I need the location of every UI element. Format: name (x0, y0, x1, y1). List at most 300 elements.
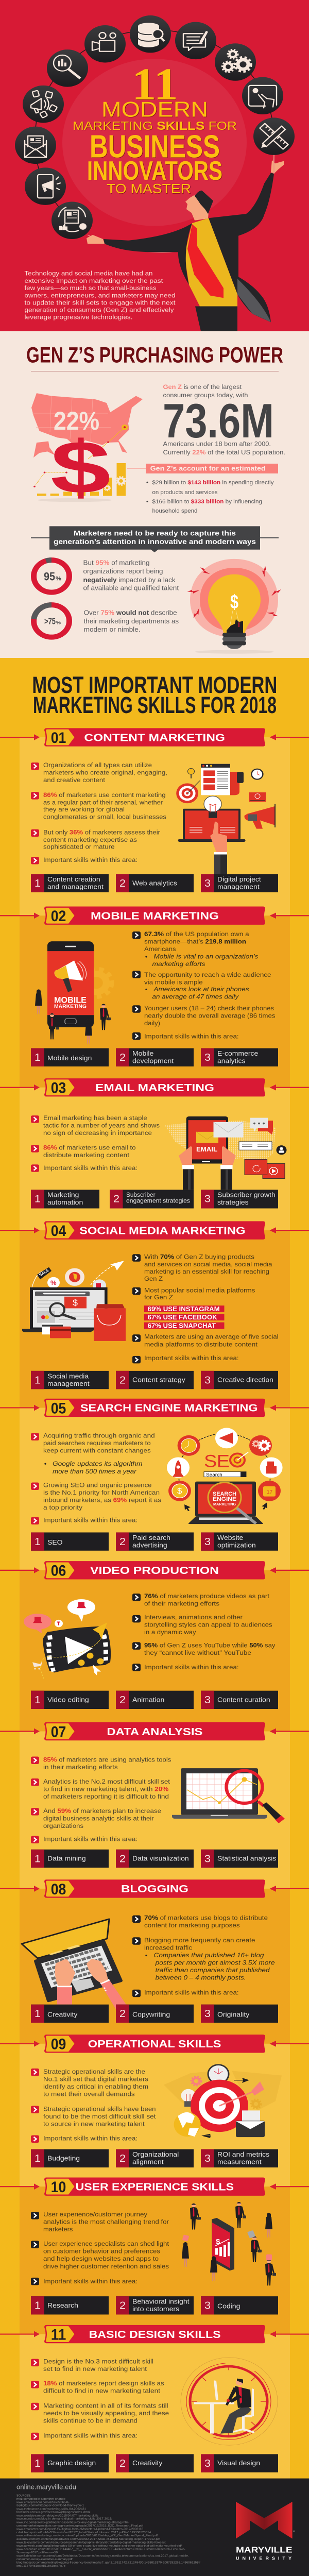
banner 05: SEARCH ENGINE MARKETING (80, 1403, 258, 1414)
skill 1: 1 (35, 1694, 41, 1706)
icon: magnifier chart (47, 49, 88, 87)
banner 10: 10 (51, 2178, 66, 2196)
banner 04: SOCIAL MEDIA MARKETING (79, 1225, 245, 1236)
bullet text (31, 1756, 171, 1843)
sources list: www.entrepreneur.com/article/286545 (16, 2501, 70, 2504)
bullet text: no sign of decreasing in importance (43, 1130, 152, 1137)
donut: 95%: % (56, 576, 61, 582)
website url: online.maryville.edu (16, 2483, 76, 2490)
bullet text: storytelling styles can appeal to audiences (144, 1621, 272, 1628)
skill 3: 3 (204, 1853, 211, 1865)
bullet text: 67.3% of the US population own a (144, 931, 249, 938)
illustration: email tablet (165, 1116, 286, 1190)
bullet text: conglomerates or small, local businesses (43, 814, 166, 820)
skill 2: Mobile (132, 1050, 153, 1057)
panel: 06 video production (0, 1561, 309, 1732)
bullet text: they “cannot live without” YouTube (144, 1649, 251, 1656)
intro paragraph: owners, entrepreneurs, and marketers may need (25, 292, 176, 299)
center spotlight circle (62, 59, 247, 226)
skill 2: Subscriber (126, 1191, 156, 1198)
skill 1 (31, 1532, 109, 1551)
skill 3: 3 (204, 1694, 211, 1706)
sources list: www2.deloitte.com/content/dam/Deloitte/us/Documents/technology-media-telecommunications/us-tmt-2017-global-mobile- (16, 2554, 189, 2557)
text: 75% stat: Over 75% would not describe (84, 609, 177, 616)
skill tags (31, 1371, 278, 1389)
bullet text: marketers who create original, engaging, (43, 769, 167, 776)
banner 09: 09 (51, 2035, 66, 2053)
bullet text: analytics is the most challenging trend for (43, 2218, 169, 2226)
donut: over 75%: % (56, 620, 61, 626)
skill 1: management (47, 1380, 90, 1387)
banner 07 (0, 1722, 309, 1740)
skill 3: Coding (217, 2302, 240, 2310)
skill 2: Behavioral insight (132, 2298, 190, 2305)
banner 03: EMAIL MARKETING (95, 1082, 214, 1094)
bullet text: Important skills within this area: (144, 1989, 238, 1996)
skill 2: 2 (119, 2458, 126, 2469)
footer (0, 2479, 309, 2576)
bullet text: 95% of Gen Z uses YouTube while 50% say (144, 1642, 276, 1649)
skill tags (31, 1850, 278, 1868)
bullet text: and creative content (43, 777, 106, 784)
bullet text: 18% of marketers report design skills as (43, 2380, 164, 2387)
bullet text: and services on social media, social media (144, 1261, 272, 1268)
illustration: social commerce laptop (22, 1261, 126, 1341)
skill 1: 1 (35, 1052, 41, 1063)
panel: Gen Z purchasing power (0, 331, 309, 658)
skill 2: Organizational (132, 2151, 179, 2158)
bullet text (132, 931, 275, 1040)
skill 3: 3 (204, 2300, 211, 2311)
skill 1 (31, 874, 109, 892)
bullet text: Important skills within this area: (43, 2135, 138, 2142)
skill 1: Graphic design (47, 2460, 96, 2467)
banner 11: 11 (51, 2326, 66, 2343)
bullet text: The opportunity to reach a wide audience (144, 972, 271, 978)
banner 06 (0, 1561, 309, 1580)
bullet text: media platforms to distribute content (144, 1341, 258, 1348)
title: INNOVATORS (87, 156, 222, 185)
icon: edit note (175, 22, 216, 59)
skill 1: Content creation (47, 876, 100, 883)
callout: spending estimates: $29 billion to $143 billion in spending directly (152, 480, 274, 486)
logo: Maryville University: UNIVERSITY (236, 2556, 291, 2561)
illustration: laptop with magnified chart (172, 1768, 285, 1823)
illustration: people around phone (182, 2202, 276, 2285)
skill 2: Creativity (132, 2460, 163, 2467)
bullet text: traffic than companies that published (156, 1967, 270, 1974)
donut: over 75% (34, 605, 69, 637)
skill 3: Originality (217, 2011, 250, 2018)
platform stats: 67% USE SNAPCHAT (148, 1322, 216, 1329)
bullet text: nearly double the overall average (86 times (144, 1012, 275, 1020)
bullet text: to meet their overall demands (43, 2091, 135, 2097)
skill 1 (31, 2149, 109, 2167)
bullet text (31, 2358, 169, 2440)
panel: 10 user experience skills (0, 2177, 309, 2334)
banner 01: CONTENT MARKETING (84, 732, 225, 743)
icon: mobile megaphone (25, 167, 66, 205)
skill 2 (116, 874, 194, 892)
illustration: social commerce laptop: % (50, 1280, 57, 1286)
skill tags (31, 2296, 278, 2314)
skill tags (31, 1691, 278, 1709)
skill 1: 1 (35, 878, 41, 889)
skill 1 (31, 2005, 109, 2023)
bullet text: increased traffic (144, 1944, 192, 1952)
text: 75% stat (84, 609, 179, 633)
bullet text: Important skills within this area: (43, 1165, 138, 1172)
skill 2 (116, 1691, 194, 1709)
skill 2 (116, 1532, 194, 1551)
skill 3: E-commerce (217, 1050, 258, 1057)
skill 3 (201, 1850, 278, 1868)
bullet text: in a dynamic way (144, 1629, 196, 1636)
skill 2 (116, 2296, 194, 2314)
bullet text: for Gen Z (144, 1294, 173, 1301)
bar chart and dollar sign (33, 426, 126, 509)
bullet text: Marketing content in all of its formats still (43, 2402, 168, 2410)
skill 3 (201, 1048, 278, 1066)
platform stats (144, 1305, 225, 1329)
bullet text (31, 2211, 169, 2285)
bullet text: User experience/customer journey (43, 2211, 148, 2218)
skill 1 (31, 1048, 109, 1066)
skill 3: 3 (204, 1052, 211, 1063)
bullet text: via mobile is ample (144, 979, 203, 986)
banner 06: 06 (51, 1562, 66, 1579)
bullet text: Important skills within this area: (144, 1664, 238, 1671)
skill tags (31, 2454, 278, 2472)
skill 2: 2 (113, 1194, 119, 1205)
banner 05 (0, 1399, 309, 1417)
illustration: SEO ring: MARKETING (213, 1502, 236, 1506)
skill 1: Budgeting (47, 2155, 80, 2162)
bullet text: But only 36% of marketers assess their (43, 829, 160, 836)
bullet text: to source in new marketing talent (43, 2121, 145, 2127)
skill 3 (201, 1190, 278, 1208)
illustration: email tablet: EMAIL (196, 1146, 217, 1153)
sources list: moz.com/google-algorithm-change (16, 2497, 66, 2501)
skill 1: 1 (35, 2458, 41, 2469)
banner 07: 07 (51, 1723, 66, 1740)
bullet text: Americans (144, 946, 176, 953)
text: 95% stat: But 95% of marketing (83, 559, 149, 566)
skill 3: measurement (217, 2158, 262, 2166)
skill 1: Mobile design (47, 1055, 92, 1062)
skill 3: 3 (204, 2458, 211, 2469)
bullet text: daily) (144, 1020, 160, 1027)
sources list: factfinder.census.gov/faces/nav/jsf/pages/index.xhtml (16, 2511, 90, 2514)
skill 3: Subscriber growth (217, 1191, 276, 1199)
banner 03 (0, 1078, 309, 1096)
bullet text: keep current with constant changes (43, 1447, 151, 1454)
skill 1: Social media (47, 1372, 89, 1380)
sources list: www.accenture.com/t20170503T114448Z__w__/us-en/_acnmedia/PDF-44/Accenture-Retail-Customer-Research-Executive- (16, 2548, 185, 2551)
banner 07: DATA ANALYSIS (107, 1726, 202, 1738)
icon: tablet touch (242, 77, 283, 114)
skill 2: 2 (119, 1536, 126, 1548)
bullet text: Blogging more frequently can create (144, 1937, 255, 1944)
banner 04 (0, 1221, 309, 1240)
skill 2: 2 (119, 1853, 126, 1865)
skill 3: ROI and metrics (217, 2151, 269, 2158)
bullet text: a top priority (43, 1504, 83, 1511)
connecting ring of skill icons (35, 30, 274, 221)
bullet text: Important skills within this area: (144, 1033, 238, 1040)
bullet text: 70% of marketers use blogs to distribute (144, 1914, 268, 1922)
bullet text: 86% of marketers use email to (43, 1144, 136, 1151)
skill 2: Copywriting (132, 2011, 170, 2018)
illustration: mobile marketing phone: MOBILE (54, 995, 87, 1005)
illustration: people around phone: $ (216, 2238, 220, 2246)
sources list: sm.0118794d1ct6e811bk1jotc7sj7z (16, 2564, 65, 2568)
bullet text: they are working for global (43, 806, 125, 813)
bullet text: Email marketing has been a staple (43, 1115, 147, 1122)
sources list: www.wordstream.com/blog/ws/2015/04/07/marketing-skills (16, 2514, 98, 2517)
skill 2: 2 (119, 1375, 126, 1386)
skill 1: 1 (35, 2008, 41, 2020)
illustration: SEO ring: 17 (267, 1490, 272, 1495)
bullet text: marketing efforts (152, 961, 205, 968)
sources list: consumer-survey-executive-summary.pdf (16, 2557, 73, 2561)
illustration: light bulb (187, 559, 282, 654)
map of the US with 22% (31, 393, 143, 459)
sources list: 3qdigital.com/whitepaper-download-thank-you-1 (16, 2504, 84, 2507)
skill 2: Paid search (132, 1534, 170, 1541)
background: yellow skills area (0, 658, 309, 2479)
skill 2: Content strategy (132, 1376, 185, 1383)
bullet text: Design is the No.3 most difficult skill (43, 2358, 153, 2365)
banner 11: BASIC DESIGN SKILLS (89, 2329, 221, 2341)
bullet text: organizations (43, 1823, 83, 1829)
callout: marketers need to be ready: Marketers need to be ready to capture this (74, 530, 236, 537)
stat: 73.6M Americans: 73.6M (163, 394, 274, 448)
skill 3: 3 (204, 1375, 211, 1386)
panel: 05 search engine marketing (0, 1399, 309, 1570)
heading: most important skills (32, 672, 277, 718)
panel: 09 operational skills (0, 2035, 309, 2187)
bullet text: Companies that published 16+ blog (153, 1952, 264, 1959)
illustration: SEO ring: SEARCH (213, 1491, 236, 1497)
bullet text (31, 1115, 160, 1172)
skill 1: Data mining (47, 1855, 86, 1862)
sources list: www.adweek.com/digital/infographic-50-of-gen-z-cant-live-without-youtube-and-other-stats-that-will-make-you-feel-old/ (16, 2544, 182, 2548)
skill 1 (31, 1850, 109, 1868)
callout: marketers need to be ready (31, 526, 279, 552)
bullet text: No.1 skill set that digital marketers (43, 2076, 148, 2082)
bullet text: Mobile is vital to an organization’s (153, 953, 258, 960)
sources list: Summary-2017.pdf#zoom=50 (16, 2551, 58, 2554)
panel: 02 mobile marketing (0, 907, 309, 1088)
skill 3: Content curation (217, 1696, 270, 1703)
skill 3 (201, 1532, 278, 1551)
skill 1: and management (47, 883, 104, 890)
stat: 73.6M Americans: Americans under 18 born after 2000. (163, 440, 271, 447)
bullet text: User experience specialists can shed light (43, 2241, 169, 2247)
bullet text: Google updates its algorithm (53, 1460, 142, 1467)
skill 2: Animation (132, 1696, 164, 1703)
bullet text (31, 762, 167, 865)
icon: ruler and pencil (253, 117, 295, 155)
bullet text: identify as critical in enabling them (43, 2083, 148, 2090)
skill 1: automation (47, 1199, 83, 1206)
bullet text: 86% of marketers use content marketing (43, 792, 166, 799)
bullet text: on customer behavior and preferences (43, 2248, 160, 2255)
banner 08: BLOGGING (121, 1884, 188, 1895)
skill 2 (116, 2149, 194, 2167)
skill 1 (31, 1691, 109, 1709)
sources list: ascend2.com/wp-content/uploads/2017/09/Ascend2-2017-State-of-Email-Marketing-Report-170912.pdf (16, 2537, 160, 2541)
bullet text: Important skills within this area: (144, 1355, 238, 1362)
bullet text: Important skills within this area: (43, 1836, 138, 1842)
skill 3 (201, 2149, 278, 2167)
callout: spending estimates: Gen Z’s account for an estimated (150, 465, 266, 472)
intro paragraph: to update their skill sets to engage with the next (25, 299, 176, 306)
title (73, 59, 237, 196)
bullet text: Analytics is the No.2 most difficult skill set (43, 1778, 170, 1785)
sources list: www.mondo.com/blog-in-demand-digital-marketing-skills-2017-2018/ (16, 2517, 112, 2521)
bullet text: of their marketing efforts (144, 1600, 219, 1607)
skill 3: Digital project (217, 876, 261, 883)
intro paragraph: leverage progressive technologies. (25, 314, 132, 320)
bullet text: Acquiring traffic through organic and (43, 1432, 155, 1439)
bullet text: Organizations of all types can utilize (43, 762, 152, 769)
bullet text: drive higher customer retention and sales (43, 2263, 169, 2270)
icon: social megaphone (23, 86, 64, 123)
skill 2 (116, 1371, 194, 1389)
bullet text: sophisticated or mature (43, 843, 115, 850)
map of the US with 22%: 22% (54, 406, 99, 435)
skill 3 (201, 2454, 278, 2472)
skill 2: 2 (119, 878, 126, 889)
skill 2: 2 (119, 1694, 126, 1706)
skill 2: 2 (119, 2300, 126, 2311)
bullet text: distribute marketing content (43, 1151, 130, 1159)
bullet text: found to be the most difficult skill set (43, 2113, 156, 2120)
sources list: blog.hubspot.com/marketing/blogging-frequency-benchmarks?_ga=2.19911742.721249430.1495813170-2087292262.1486062258# (16, 2561, 201, 2564)
skill 3 (201, 2005, 278, 2023)
skill 1: 1 (35, 1536, 41, 1548)
intro paragraph: generation of consumers (Gen Z) and effectively (25, 307, 174, 313)
title: BUSINESS (90, 128, 220, 164)
platform stats: 67% USE FACEBOOK (148, 1314, 217, 1321)
banner 02: 02 (51, 907, 66, 925)
title: MODERN (101, 98, 208, 122)
intro paragraph (25, 270, 176, 320)
bullet text: Important skills within this area: (43, 2432, 138, 2439)
stat: 73.6M Americans (163, 383, 285, 456)
illustration: content marketing (176, 764, 276, 875)
banner 10: USER EXPERIENCE SKILLS (76, 2181, 234, 2193)
panel: 01 content marketing (0, 728, 309, 916)
banner 09: OPERATIONAL SKILLS (88, 2039, 221, 2050)
bullet text: 76% of marketers produce videos as part (144, 1593, 270, 1600)
skill 1: Marketing (47, 1191, 79, 1199)
skill 3: management (217, 883, 260, 890)
icon: video camera (84, 25, 126, 62)
banner 06: VIDEO PRODUCTION (90, 1565, 219, 1577)
skill 2 (116, 2454, 194, 2472)
bullet text: and help design websites and apps to (43, 2256, 159, 2262)
sources list: www.teksystems.com/en/resources/research/infographic-library/it-trends/top-digital-marketing-skills-forecast (16, 2541, 166, 2544)
skill 3 (201, 1691, 278, 1709)
banner 11 (0, 2325, 309, 2343)
skill 1: 1 (35, 2153, 41, 2164)
skill 2: advertising (132, 1541, 167, 1549)
bullet text: Younger users (18 – 24) check their phones (144, 1005, 274, 1012)
skill 2: alignment (132, 2158, 164, 2166)
skill 1 (31, 2454, 109, 2472)
skill 3: 3 (204, 878, 211, 889)
icon: database search (130, 15, 171, 53)
sources list: cdn2.hubspot.net/hubfs/53/assets/soi/2017/global/State of Inbound 2017.pdf?t=1519336523014 (16, 2531, 151, 2534)
bullet text: an average of 47 times daily (152, 993, 239, 1000)
panel: 03 email marketing (0, 1078, 309, 1230)
skill 2: 2 (119, 2153, 126, 2164)
skill 3 (201, 2296, 278, 2314)
callout: spending estimates: $166 billion to $333 billion by influencing (152, 499, 262, 505)
bullet text: Important skills within this area: (43, 1517, 138, 1523)
skill 2: Data visualization (132, 1855, 189, 1862)
skill 3: Statistical analysis (217, 1855, 277, 1862)
icon: email newsletter (15, 127, 56, 164)
bullet text: Gen Z (144, 1276, 163, 1282)
bullet text: content for marketing purposes (144, 1922, 240, 1929)
bullet text: difficult to find in new marketing talent (43, 2387, 161, 2395)
bullet text (132, 1914, 275, 1997)
sources list: www.millennialmarketing.com/wp-content/uploads/2018/01/Barkley_WP_GenZMarketSpend_Final.pdf (16, 2534, 158, 2537)
title: MARKETING SKILLS FOR (73, 120, 237, 133)
callout: spending estimates: household spend (152, 509, 197, 514)
callout: spending estimates: on products and services (152, 489, 218, 496)
icon: blog cycle (52, 202, 93, 239)
bullet text (31, 2068, 156, 2143)
skill tags (31, 2005, 278, 2023)
banner 05: 05 (51, 1399, 66, 1417)
sources list: www.inc.com/jeremy-goldman/7-essentials-for-any-digital-marketing-strategy.html (16, 2521, 129, 2524)
bullet text: Important skills within this area: (43, 2278, 138, 2285)
bullet text: digital business analytic skills at their (43, 1815, 154, 1822)
skill 1: Video editing (47, 1696, 89, 1703)
skill 3: optimization (217, 1541, 256, 1549)
skill tags (31, 1048, 278, 1066)
illustration: SEO ring: Search (206, 1472, 222, 1478)
bullet text: more than 500 times a year (53, 1468, 137, 1475)
banner 08 (0, 1879, 309, 1898)
bullet text: paid searches requires marketers to (43, 1440, 151, 1447)
callout: marketers need to be ready: generation’s attention in innovative and modern ways (54, 538, 256, 546)
banner 03: 03 (51, 1079, 66, 1096)
bullet text: as a regular part of their arsenal, whether (43, 799, 163, 806)
bullet text: skills continue to be in demand (43, 2417, 138, 2425)
illustration: mobile marketing phone: MARKETING (54, 1004, 87, 1010)
skill 2 (116, 2005, 194, 2023)
illustration: light bulb: $ (230, 591, 238, 613)
skill 2 (116, 1048, 194, 1066)
bullet text: posts per month got almost 3.5X more (154, 1959, 275, 1967)
title: TO MASTER (107, 181, 191, 196)
skill tags (31, 2149, 278, 2167)
skill 2: into customers (132, 2306, 179, 2313)
skill 2: engagement strategies (126, 1197, 190, 1204)
bullet text (132, 1253, 279, 1363)
text: 95% stat (83, 559, 179, 591)
intro paragraph: Technology and social media have had an (25, 270, 153, 277)
skill 2: Web analytics (132, 879, 177, 887)
panel: 08 blogging (0, 1879, 309, 2044)
sources list: contentmarketinginstitute.com/wp-content/uploads/2017/12/2018_B2C_Research_Final.pdf (16, 2524, 143, 2528)
